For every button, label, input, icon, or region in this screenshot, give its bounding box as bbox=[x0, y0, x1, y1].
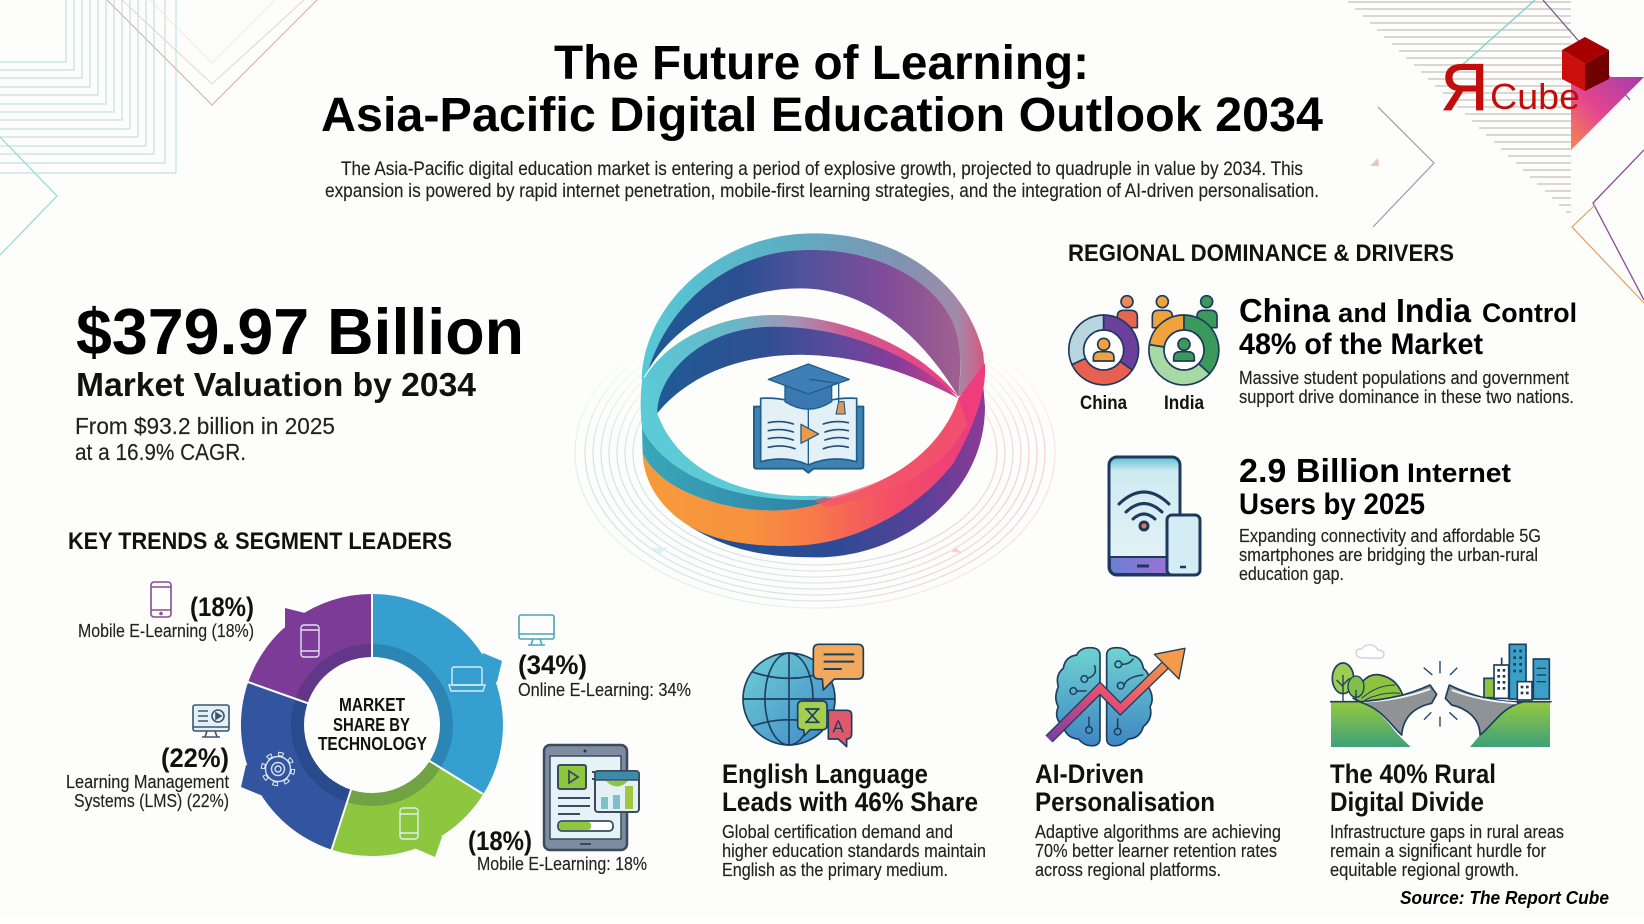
donut centre label bbox=[318, 695, 427, 754]
driver: internet users: Expanding connectivity and affordable 5G bbox=[1239, 526, 1541, 546]
driver: China and India: 48% of the Market bbox=[1239, 328, 1483, 361]
icon: mobile phone bbox=[151, 582, 171, 617]
driver: China and India: Control bbox=[1482, 298, 1577, 328]
China figure bbox=[1117, 296, 1137, 328]
concentric rings bbox=[574, 367, 1056, 608]
second ribbon rim bbox=[643, 315, 958, 420]
country labels: India bbox=[1164, 393, 1204, 414]
body: Adaptive algorithms are achieving bbox=[1035, 822, 1281, 842]
callout: learning management systems 22%: Learning Management bbox=[66, 772, 229, 792]
orange to pink band bbox=[643, 363, 985, 546]
donut centre label: SHARE BY bbox=[333, 715, 410, 735]
heading: Leads with 46% Share bbox=[722, 787, 978, 817]
segment: online e-learning 34% bbox=[372, 594, 503, 794]
section heading: key trends: KEY TRENDS & SEGMENT LEADERS bbox=[68, 528, 452, 555]
icon: lms monitor bbox=[193, 705, 229, 737]
heading: Personalisation bbox=[1035, 787, 1215, 817]
body: equitable regional growth. bbox=[1330, 860, 1519, 880]
headline stat: market valuation: Market Valuation by 2034 bbox=[76, 366, 477, 403]
callout: mobile e-learning 18% bottom bbox=[468, 745, 647, 874]
body: remain a significant hurdle for bbox=[1330, 841, 1546, 861]
icon: phone with wifi bbox=[1109, 457, 1200, 575]
driver: internet users: education gap. bbox=[1239, 564, 1344, 584]
navy base band bbox=[690, 387, 985, 557]
title: Asia-Pacific Digital Education Outlook 2034 bbox=[321, 89, 1323, 142]
intro text bbox=[325, 158, 1319, 202]
segment: learning management systems 22% bbox=[241, 682, 352, 850]
logo cube bbox=[1562, 37, 1609, 91]
heading: The 40% Rural bbox=[1330, 759, 1496, 789]
callout: mobile e-learning 18% top: Mobile E-Learning (18%) bbox=[78, 621, 254, 641]
callout: online e-learning 34%: (34%) bbox=[518, 650, 587, 680]
intro text: The Asia-Pacific digital education market is entering a period of explosive growth, projected to quadruple in value by 2034. This bbox=[341, 158, 1303, 180]
background line pattern: top left bbox=[0, 0, 317, 255]
callout: mobile e-learning 18% bottom: Mobile E-Learning: 18% bbox=[477, 854, 647, 874]
country labels bbox=[1080, 393, 1204, 414]
heading: English Language bbox=[722, 759, 928, 789]
logo triangle accent bbox=[1571, 77, 1644, 150]
body bbox=[1035, 822, 1281, 880]
panel: english language bbox=[722, 644, 986, 880]
India figures bbox=[1152, 296, 1217, 328]
donut centre label: TECHNOLOGY bbox=[318, 734, 427, 754]
headline stat: market valuation: at a 16.9% CAGR. bbox=[75, 439, 246, 465]
country labels: China bbox=[1080, 393, 1127, 414]
body: 70% better learner retention rates bbox=[1035, 841, 1277, 861]
logo wordmark: Cube bbox=[1490, 76, 1580, 117]
callout: learning management systems 22%: (22%) bbox=[161, 743, 229, 773]
icon: tablet with dashboard bbox=[544, 745, 639, 850]
callout: mobile e-learning 18% top: (18%) bbox=[190, 592, 254, 622]
section heading: regional dominance: REGIONAL DOMINANCE & DRIVERS bbox=[1068, 240, 1454, 267]
right front ribbon highlight bbox=[813, 363, 985, 507]
segment icons bbox=[263, 625, 485, 839]
heading: Digital Divide bbox=[1330, 787, 1484, 817]
body: Global certification demand and bbox=[722, 822, 953, 842]
driver: China and India bbox=[1239, 292, 1577, 407]
driver: China and India: Massive student populations and government bbox=[1239, 368, 1569, 388]
donut chart: market share by technology bbox=[241, 594, 503, 857]
title bbox=[321, 37, 1323, 142]
icon: China and India donuts bbox=[1069, 296, 1219, 385]
heading: AI-Driven bbox=[1035, 759, 1144, 789]
central ribbon illustration bbox=[575, 233, 1055, 608]
headline stat: market valuation bbox=[75, 295, 524, 465]
callout: mobile e-learning 18% top bbox=[78, 582, 254, 641]
driver: internet users: 2.9 Billion bbox=[1239, 452, 1400, 489]
left front ribbon bbox=[641, 377, 833, 500]
driver: internet users bbox=[1239, 452, 1541, 584]
callout: mobile e-learning 18% bottom: (18%) bbox=[468, 826, 532, 856]
panel: rural digital divide bbox=[1330, 644, 1564, 880]
logo letter: Я bbox=[1441, 50, 1488, 124]
icon: globe with speech bubbles: A bbox=[832, 716, 844, 736]
centre opening bbox=[657, 355, 958, 496]
title: The Future of Learning: bbox=[554, 37, 1089, 90]
driver: China and India: and bbox=[1338, 298, 1387, 328]
callout: online e-learning 34% bbox=[518, 615, 691, 700]
India donut bbox=[1149, 315, 1219, 385]
body: across regional platforms. bbox=[1035, 860, 1221, 880]
driver: China and India: support drive dominance in these two nations. bbox=[1239, 387, 1574, 407]
icon: broken bridge bbox=[1330, 644, 1552, 747]
heading bbox=[1330, 759, 1496, 817]
China donut bbox=[1069, 315, 1139, 385]
body: higher education standards maintain bbox=[722, 841, 986, 861]
second ribbon wall bbox=[657, 327, 958, 413]
body: Infrastructure gaps in rural areas bbox=[1330, 822, 1564, 842]
segment: mobile e-learning 18% green bbox=[332, 760, 483, 857]
intro text: expansion is powered by rapid internet penetration, mobile-first learning strategies, and the integration of AI-driven personalisation. bbox=[325, 180, 1319, 202]
top outer rim bbox=[642, 233, 985, 397]
callout: learning management systems 22% bbox=[66, 705, 229, 811]
callout: learning management systems 22%: Systems (LMS) (22%) bbox=[74, 791, 229, 811]
body bbox=[1330, 822, 1564, 880]
body bbox=[722, 822, 986, 880]
headline stat: market valuation: From $93.2 billion in 2025 bbox=[75, 413, 335, 439]
logo: RCube bbox=[1441, 37, 1609, 124]
heading bbox=[722, 759, 978, 817]
icon: book and graduation cap bbox=[754, 364, 863, 473]
driver: internet users: Users by 2025 bbox=[1239, 488, 1425, 521]
segment: mobile e-learning 18% purple bbox=[248, 594, 372, 704]
lower teal wall bbox=[642, 417, 833, 511]
icon: brain with growth arrow bbox=[1049, 648, 1185, 746]
driver: China and India: India bbox=[1396, 292, 1472, 329]
source note: Source: The Report Cube bbox=[1400, 888, 1609, 908]
icon: monitor bbox=[519, 615, 554, 645]
icon: globe with speech bubbles bbox=[743, 644, 863, 747]
panel: ai-driven personalisation bbox=[1035, 648, 1281, 880]
body: English as the primary medium. bbox=[722, 860, 948, 880]
background line pattern: top right bbox=[1348, 0, 1644, 303]
driver: China and India: China bbox=[1239, 292, 1331, 329]
driver: internet users: Internet bbox=[1407, 458, 1511, 488]
headline stat: market valuation: $379.97 Billion bbox=[76, 295, 524, 368]
heading bbox=[1035, 759, 1215, 817]
top inner wall bbox=[648, 250, 960, 397]
callout: online e-learning 34%: Online E-Learning: 34% bbox=[518, 680, 691, 700]
donut centre label: MARKET bbox=[339, 695, 405, 715]
driver: internet users: smartphones are bridging the urban-rural bbox=[1239, 545, 1538, 565]
